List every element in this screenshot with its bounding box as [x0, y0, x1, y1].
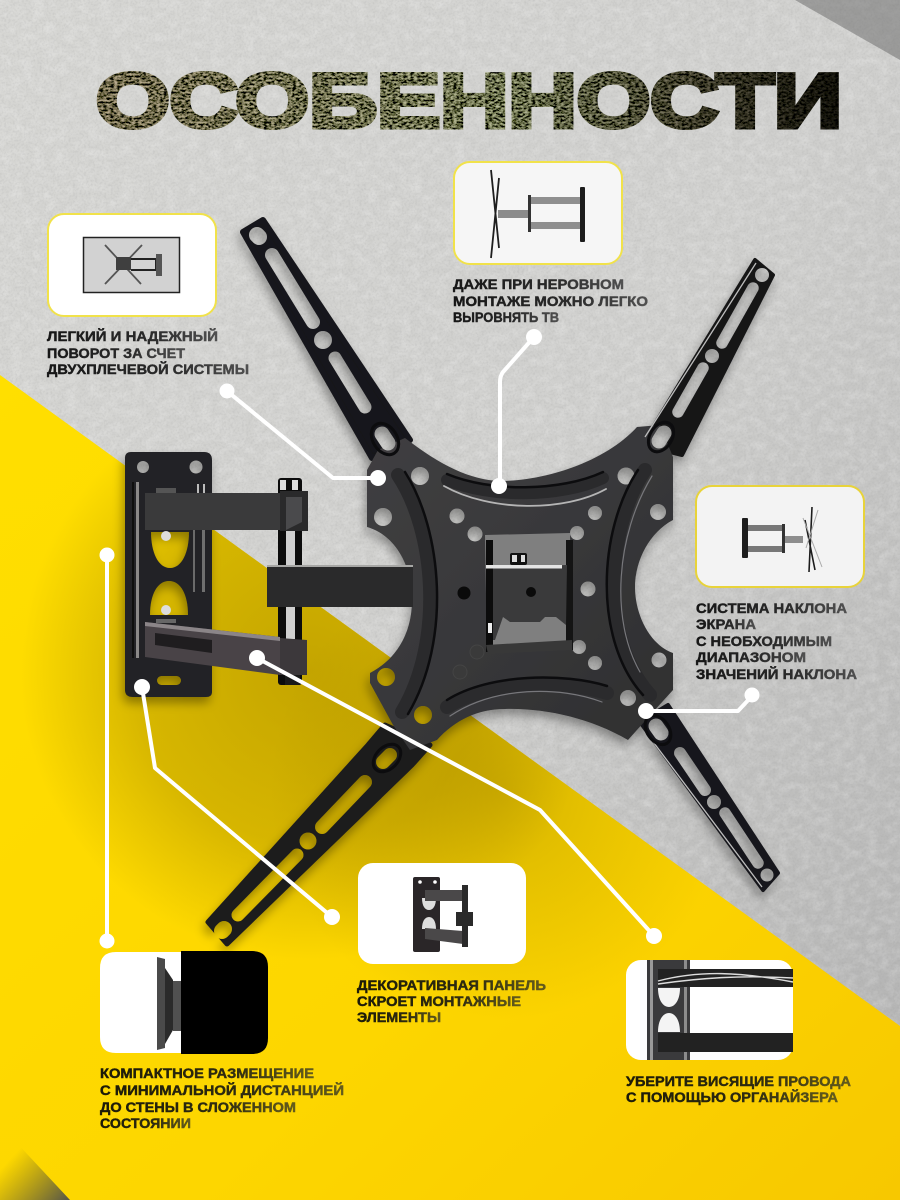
text: tilt feature: ЗНАЧЕНИЙ НАКЛОНА: [696, 665, 857, 682]
center tilt mechanism: [485, 533, 573, 654]
panel: decorative cover thumbnail: [358, 863, 526, 964]
mount plate details: [366, 418, 679, 777]
right slot: [614, 470, 650, 695]
lower arm: [145, 622, 307, 685]
callout lines: [100, 329, 760, 948]
mount arm: top right: [642, 260, 773, 455]
text: tilt feature: СИСТЕМА НАКЛОНА: [696, 600, 847, 616]
text: compact placement feature: ДО СТЕНЫ В СЛОЖЕННОМ: [100, 1099, 296, 1115]
text: tilt feature: [696, 600, 857, 682]
title: ОСОБЕННОСТИ: [96, 59, 842, 144]
text: leveling feature: МОНТАЖЕ МОЖНО ЛЕГКО: [453, 293, 648, 309]
upper arm: [145, 491, 308, 531]
panel: rotation thumbnail: [48, 214, 216, 316]
text: decorative cover feature: [357, 977, 546, 1025]
text: decorative cover feature: ДЕКОРАТИВНАЯ ПАНЕЛЬ: [357, 977, 546, 993]
TV wall mount product: [125, 220, 778, 944]
pivot post: [278, 478, 302, 685]
text: leveling feature: ВЫРОВНЯТЬ ТВ: [453, 309, 559, 325]
callout line: leveling: [491, 329, 542, 494]
text: cable organizer feature: [626, 1073, 851, 1105]
mount arm: bottom right: [640, 705, 778, 890]
text: leveling feature: [453, 276, 648, 325]
background: yellow diagonal area: [0, 375, 900, 1200]
mount arm: top left: [243, 220, 410, 458]
callout line: decorative panel: [134, 679, 340, 925]
text: decorative cover feature: ЭЛЕМЕНТЫ: [357, 1009, 441, 1025]
text: compact placement feature: [100, 1065, 344, 1131]
middle arm: [267, 565, 413, 607]
text: compact placement feature: КОМПАКТНОЕ РАЗМЕЩЕНИЕ: [100, 1065, 314, 1081]
arm pivot rings: [366, 418, 679, 777]
text: tilt feature: ДИАПАЗОНОМ: [696, 649, 806, 665]
callout line: rotation: [220, 384, 386, 486]
panel: leveling thumbnail: [454, 162, 622, 264]
text: compact placement feature: С МИНИМАЛЬНОЙ ДИСТАНЦИЕЙ: [100, 1081, 344, 1098]
text: leveling feature: ДАЖЕ ПРИ НЕРОВНОМ: [453, 276, 624, 292]
text: tilt feature: С НЕОБХОДИМЫМ: [696, 633, 832, 649]
text: rotation feature: ДВУХПЛЕЧЕВОЙ СИСТЕМЫ: [47, 360, 249, 377]
callout line: cable organizer: [249, 650, 662, 944]
wall bracket plate: [125, 452, 212, 697]
mount arm: bottom left: [208, 725, 430, 944]
text: rotation feature: ЛЕГКИЙ И НАДЕЖНЫЙ: [47, 327, 218, 344]
mount plate: [367, 425, 673, 750]
callout line: compact: [100, 548, 114, 948]
top slot: [447, 478, 603, 493]
text: tilt feature: ЭКРАНА: [696, 616, 756, 632]
text: cable organizer feature: УБЕРИТЕ ВИСЯЩИЕ ПРОВОДА: [626, 1073, 851, 1089]
panel: cable organizer thumbnail: [626, 960, 793, 1060]
text: decorative cover feature: СКРОЕТ МОНТАЖНЫЕ: [357, 993, 521, 1009]
text: rotation feature: [47, 327, 249, 377]
text: rotation feature: ПОВОРОТ ЗА СЧЕТ: [47, 345, 185, 361]
text: cable organizer feature: С ПОМОЩЬЮ ОРГАНАЙЗЕРА: [626, 1088, 838, 1105]
bracket bolts: [156, 488, 176, 623]
arm edge highlights: [645, 263, 762, 887]
text: compact placement feature: СОСТОЯНИИ: [100, 1115, 191, 1131]
panel: compact placement thumbnail: [100, 951, 268, 1054]
wall bracket ribs: [132, 482, 205, 658]
left slot: [398, 475, 430, 712]
panel: tilt thumbnail: [696, 486, 864, 587]
swing arm assembly: [132, 478, 413, 685]
bottom slot: [447, 685, 607, 707]
callout line: tilt: [638, 688, 760, 719]
